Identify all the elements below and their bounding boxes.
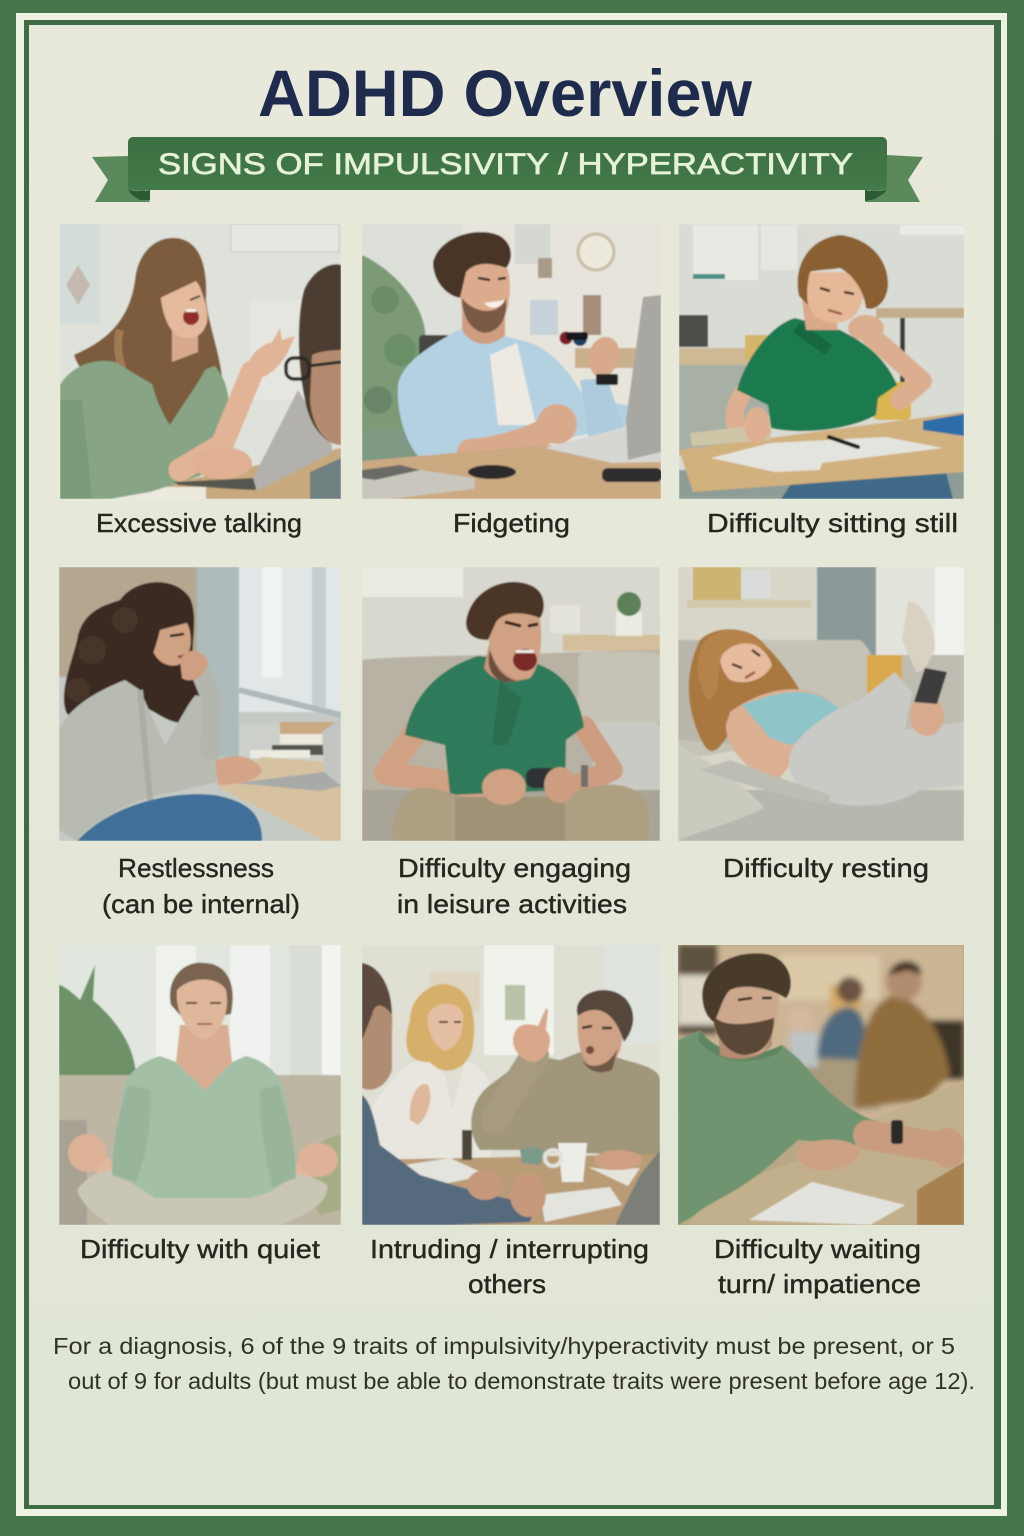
right man hand	[594, 1150, 642, 1170]
panel: restlessness	[59, 567, 341, 919]
sweater	[59, 680, 221, 841]
photo: woman meditating on sofa	[59, 945, 341, 1225]
title: ADHD Overview	[258, 56, 753, 128]
caption line 2: turn/ impatience	[718, 1269, 921, 1299]
trousers	[392, 785, 649, 841]
arms	[386, 727, 498, 790]
left arm	[735, 385, 750, 437]
hand on keyboard	[215, 756, 262, 785]
forearms	[92, 1158, 127, 1182]
desk	[166, 448, 341, 499]
ribbon body	[128, 137, 887, 190]
caption line 1: Restlessness	[118, 853, 274, 883]
hair	[689, 629, 807, 751]
hands	[68, 1134, 106, 1172]
hand on chin	[180, 651, 208, 680]
jeans	[77, 794, 262, 841]
sofa	[362, 650, 660, 841]
caption line 1: Difficulty engaging	[398, 853, 631, 883]
chair	[873, 382, 911, 420]
mug	[558, 1143, 587, 1182]
man foreground	[299, 264, 341, 445]
head	[170, 963, 233, 1015]
right arm	[868, 333, 922, 400]
polo shirt	[737, 318, 897, 431]
forearm	[868, 1135, 944, 1148]
sofa	[59, 1075, 341, 1225]
caption: Excessive talking	[96, 508, 302, 538]
fidget spinner	[560, 332, 572, 344]
photo: woman lying on sofa with phone	[678, 567, 964, 841]
caption: Fidgeting	[453, 508, 570, 538]
blue binder	[923, 414, 964, 436]
photo: impatient man in cafe	[678, 945, 965, 1225]
footer note	[53, 1333, 975, 1394]
caption line 2: others	[468, 1269, 546, 1299]
laptop	[545, 426, 661, 463]
pants	[77, 1169, 327, 1225]
sofa	[678, 640, 881, 760]
polo shirt	[405, 656, 584, 795]
desk	[362, 445, 661, 499]
woman hair	[406, 984, 474, 1071]
banner ribbon	[92, 137, 923, 202]
plant	[362, 254, 426, 431]
background furniture	[679, 315, 708, 347]
hair	[64, 582, 202, 723]
neck	[176, 1025, 232, 1090]
woman face	[428, 1004, 463, 1051]
hand and phone	[910, 696, 944, 736]
laptop	[174, 478, 256, 490]
foreground hands	[467, 1170, 503, 1200]
neck and face	[172, 325, 198, 362]
head	[461, 312, 506, 345]
notebook	[711, 437, 943, 472]
desk items	[362, 470, 475, 499]
papers	[404, 1158, 487, 1188]
right man head	[577, 1009, 622, 1068]
plant	[59, 965, 136, 1075]
left ribbon tail	[92, 156, 150, 202]
woman hand	[410, 1084, 430, 1125]
skin torso	[726, 689, 835, 778]
panel: difficulty with quiet	[59, 945, 341, 1264]
laptop	[322, 718, 341, 786]
photo: man yelling with game controller	[362, 567, 660, 841]
raised hand	[588, 337, 619, 380]
panel: difficulty sitting still	[679, 224, 964, 538]
forearm to chin	[200, 670, 212, 750]
hand	[797, 1140, 860, 1170]
paper	[749, 1182, 905, 1225]
hands and controller	[482, 769, 526, 805]
footer line 2: out of 9 for adults (but must be able to demonstrate traits were present before age 12).	[68, 1368, 975, 1394]
shirt	[60, 361, 229, 499]
caption: Difficulty resting	[723, 853, 929, 883]
desk	[218, 757, 341, 841]
panel: excessive talking	[60, 224, 341, 538]
table	[362, 1154, 660, 1225]
head	[714, 978, 778, 1055]
books	[280, 722, 338, 734]
desk	[679, 470, 964, 499]
hand on keyboard	[192, 447, 252, 479]
raised arm	[180, 372, 252, 470]
head	[802, 300, 838, 330]
caption line 1: Difficulty waiting	[714, 1234, 921, 1264]
banner heading: SIGNS OF IMPULSIVITY / HYPERACTIVITY	[158, 148, 853, 181]
face	[148, 614, 191, 666]
forward arm and hand	[470, 428, 552, 452]
neck	[718, 1025, 772, 1059]
caption line 2: (can be internal)	[102, 889, 300, 919]
photo: woman talking at laptop	[60, 224, 341, 499]
panel: difficulty waiting	[678, 945, 964, 1299]
panel: leisure activities	[362, 567, 660, 919]
hand over book	[744, 407, 770, 443]
caption line 1: Intruding / interrupting	[370, 1234, 649, 1264]
shirt	[112, 1056, 296, 1198]
photo: bored boy at school desk	[679, 224, 964, 499]
pants	[789, 672, 964, 806]
head	[484, 640, 530, 682]
right fold	[865, 186, 887, 201]
raised arm	[495, 1055, 535, 1120]
left fold	[128, 186, 150, 200]
wood block	[917, 1162, 964, 1225]
chair and background desk	[418, 334, 449, 355]
right man sweater	[471, 1048, 660, 1155]
top	[742, 692, 838, 745]
caption: Difficulty with quiet	[80, 1234, 321, 1264]
footer line 1: For a diagnosis, 6 of the 9 traits of impulsivity/hyperactivity must be present, or 5	[53, 1333, 955, 1359]
woman hair back	[73, 237, 223, 385]
table	[688, 1080, 964, 1225]
photo: man with fidget spinner	[362, 224, 662, 499]
right ribbon tail	[865, 155, 923, 202]
photo: people at table, man raising finger	[362, 945, 660, 1225]
caption: Difficulty sitting still	[707, 508, 958, 538]
cafe background	[678, 945, 964, 1125]
shirt	[398, 326, 628, 460]
foreground right shape	[615, 1150, 660, 1225]
book	[690, 424, 770, 446]
foreground man	[362, 971, 392, 1090]
caption line 2: in leisure activities	[397, 889, 627, 919]
face	[719, 641, 772, 682]
panel: intruding / interrupting	[362, 945, 660, 1299]
sweater	[678, 1030, 880, 1225]
photo: pensive woman at desk	[59, 567, 341, 841]
panel: fidgeting	[362, 224, 661, 538]
panel: difficulty resting	[678, 567, 964, 883]
shoe	[902, 602, 935, 672]
woman top	[371, 1061, 495, 1160]
